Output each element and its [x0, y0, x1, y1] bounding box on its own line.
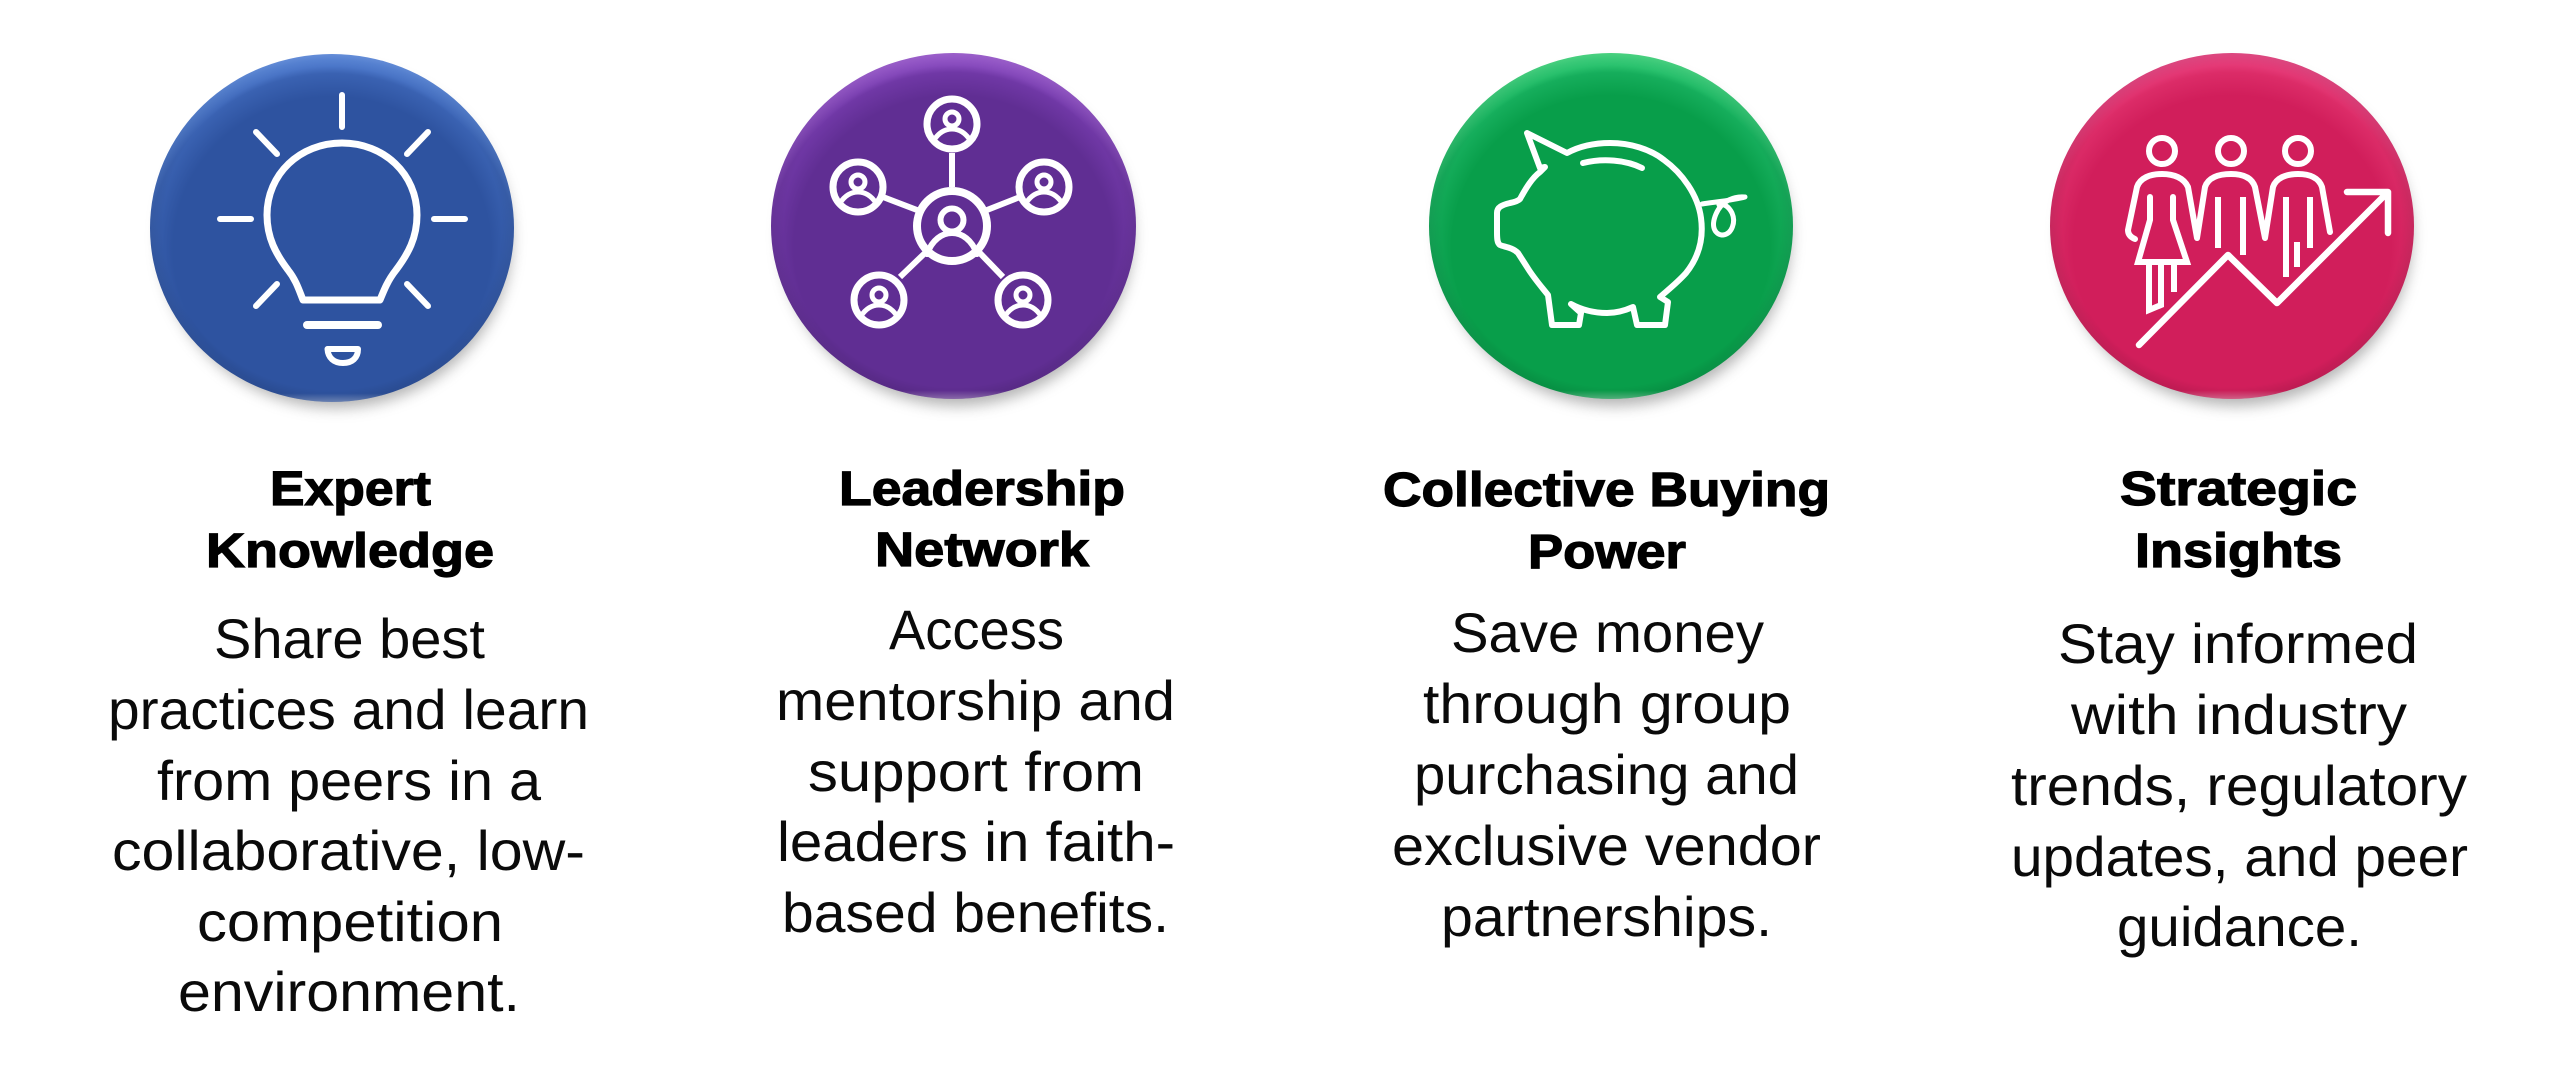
heading: Collective Buying Power: Collective Buying — [1383, 464, 1830, 517]
text: Expert Knowledge description: collaborative, low- — [112, 819, 585, 882]
text: Strategic Insights description: trends, regulatory — [2011, 754, 2467, 817]
text: Strategic Insights description: guidance. — [2117, 895, 2362, 958]
panel: Expert Knowledge — [108, 54, 589, 1023]
text: Strategic Insights description: with industry — [2070, 683, 2407, 746]
heading: Strategic Insights — [2120, 463, 2357, 578]
heading: Collective Buying Power: Power — [1528, 526, 1686, 579]
heading: Expert Knowledge: Knowledge — [206, 525, 494, 578]
text: Expert Knowledge description: Share best — [214, 607, 485, 670]
text: Strategic Insights description: updates, and peer — [2011, 825, 2468, 888]
text: Leadership Network description: leaders in faith- — [777, 810, 1175, 873]
heading: Expert Knowledge — [206, 463, 494, 578]
text: Leadership Network description: support from — [808, 740, 1144, 803]
text: Leadership Network description: based benefits. — [782, 881, 1169, 944]
icon: network badge — [771, 53, 1136, 406]
text: Strategic Insights description — [2011, 612, 2468, 958]
text: Leadership Network description: mentorship and — [776, 669, 1175, 732]
text: Strategic Insights description: Stay informed — [2058, 612, 2418, 675]
icon: light bulb badge — [150, 54, 514, 408]
heading: Strategic Insights: Strategic — [2120, 463, 2357, 516]
text: Expert Knowledge description: from peers in a — [157, 749, 542, 812]
heading: Collective Buying Power — [1383, 464, 1830, 579]
icon: people and growth arrow badge — [2050, 53, 2414, 406]
panel: Leadership Network — [771, 53, 1175, 944]
text: Leadership Network description: Access — [889, 598, 1064, 661]
text: Expert Knowledge description: competition — [197, 890, 503, 953]
text: Collective Buying Power description: purchasing and — [1414, 743, 1799, 806]
text: Collective Buying Power description: partnerships. — [1441, 885, 1772, 948]
text: Leadership Network description — [776, 598, 1175, 944]
text: Collective Buying Power description — [1392, 601, 1821, 948]
heading: Leadership Network: Leadership — [839, 463, 1125, 516]
text: Expert Knowledge description — [108, 607, 589, 1023]
heading: Strategic Insights: Insights — [2135, 525, 2342, 578]
heading: Expert Knowledge: Expert — [270, 463, 431, 516]
heading: Leadership Network: Network — [875, 524, 1089, 577]
text: Collective Buying Power description: Save money — [1451, 601, 1764, 664]
text: Expert Knowledge description: environment. — [178, 960, 520, 1023]
text: Expert Knowledge description: practices and learn — [108, 678, 589, 741]
panel: Collective Buying Power — [1383, 53, 1830, 948]
icon: piggy bank badge — [1429, 53, 1793, 406]
text: Collective Buying Power description: exclusive vendor — [1392, 814, 1821, 877]
panel: Strategic Insights — [2011, 53, 2468, 958]
heading: Leadership Network — [839, 463, 1125, 577]
text: Collective Buying Power description: through group — [1423, 672, 1791, 735]
